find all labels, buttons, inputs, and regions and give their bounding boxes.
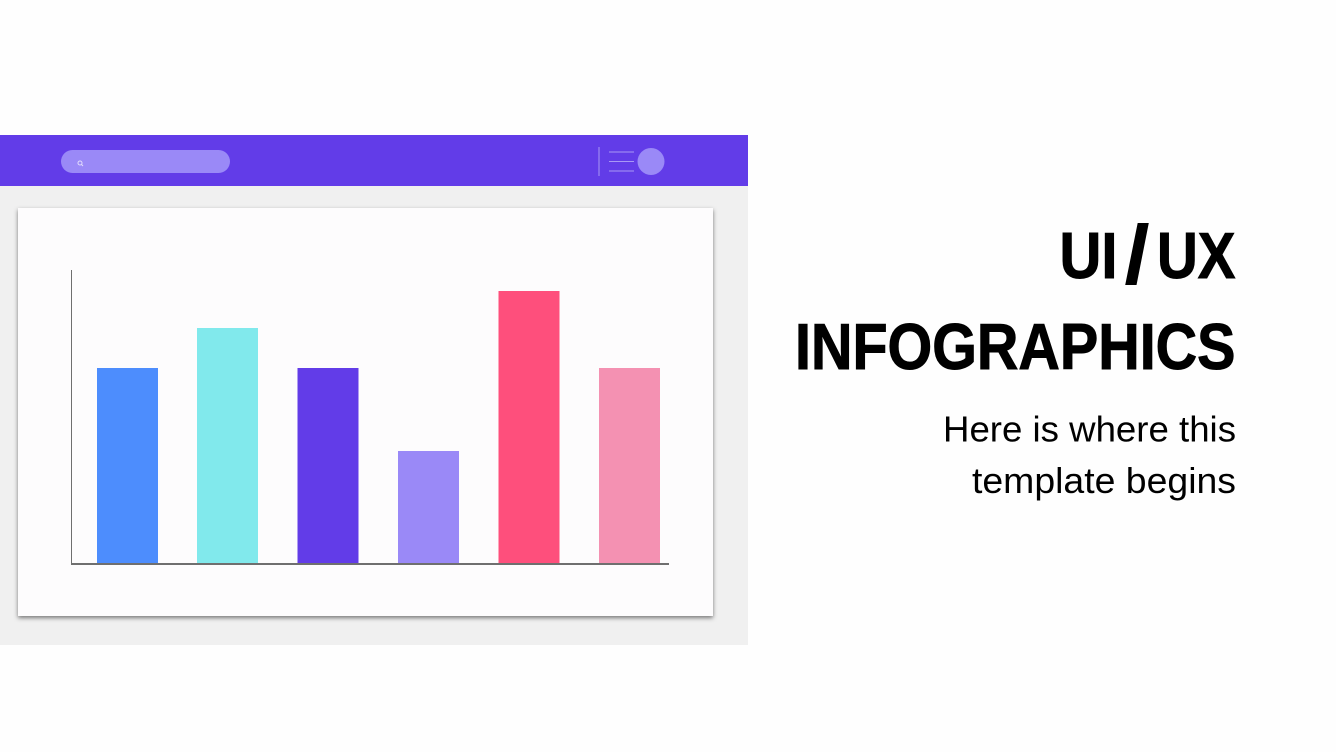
bar 1 [97,368,158,564]
panel: chart card [18,208,713,616]
icon: magnifier [78,161,83,166]
bar 3 [298,368,358,564]
bar chart [71,270,669,565]
title [795,210,1236,383]
search bar [61,150,230,173]
subtitle [943,408,1236,501]
bar 5 [498,291,560,564]
bar 2 [197,328,258,564]
subtitle: template begins [972,460,1236,501]
title: INFOGRAPHICS [795,310,1236,383]
window background [0,186,748,645]
top navigation bar [0,135,748,186]
title: / [1125,210,1149,301]
chart axes [72,270,669,564]
title: UX [1157,219,1236,292]
panel: browser window [0,135,748,645]
title: UI [1060,219,1118,292]
bar 4 [398,451,459,564]
icon: menu with divider [599,147,634,176]
subtitle: Here is where this [943,408,1236,450]
icon: user avatar [638,148,664,175]
bar 6 [599,368,660,564]
